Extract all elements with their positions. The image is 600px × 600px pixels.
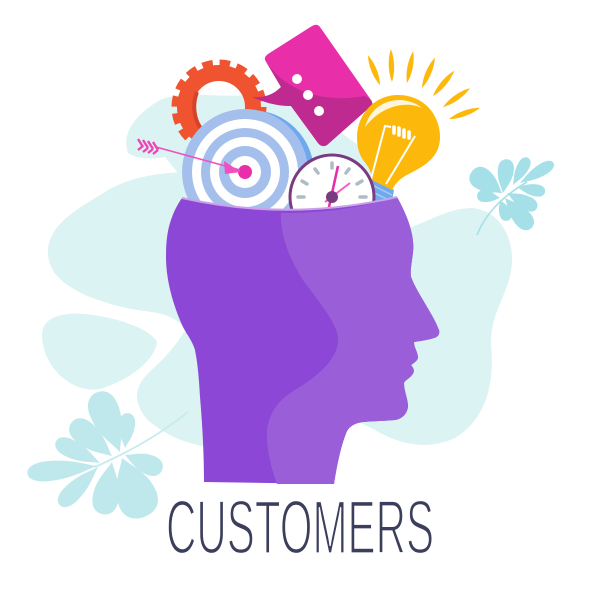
bulb glass — [357, 95, 440, 190]
leaf sprig: right — [465, 155, 557, 235]
icon: gear — [175, 63, 263, 151]
icon: speech bubble — [252, 25, 372, 146]
leaf sprig: bottom left — [26, 387, 188, 524]
head — [166, 197, 439, 484]
icon: arrow — [138, 139, 241, 174]
icon: clock — [290, 155, 374, 239]
icon: target — [182, 109, 314, 236]
icon: light bulb — [357, 49, 481, 206]
bulb base — [362, 178, 394, 206]
bulb rays — [366, 49, 481, 122]
background blobs — [42, 95, 512, 447]
